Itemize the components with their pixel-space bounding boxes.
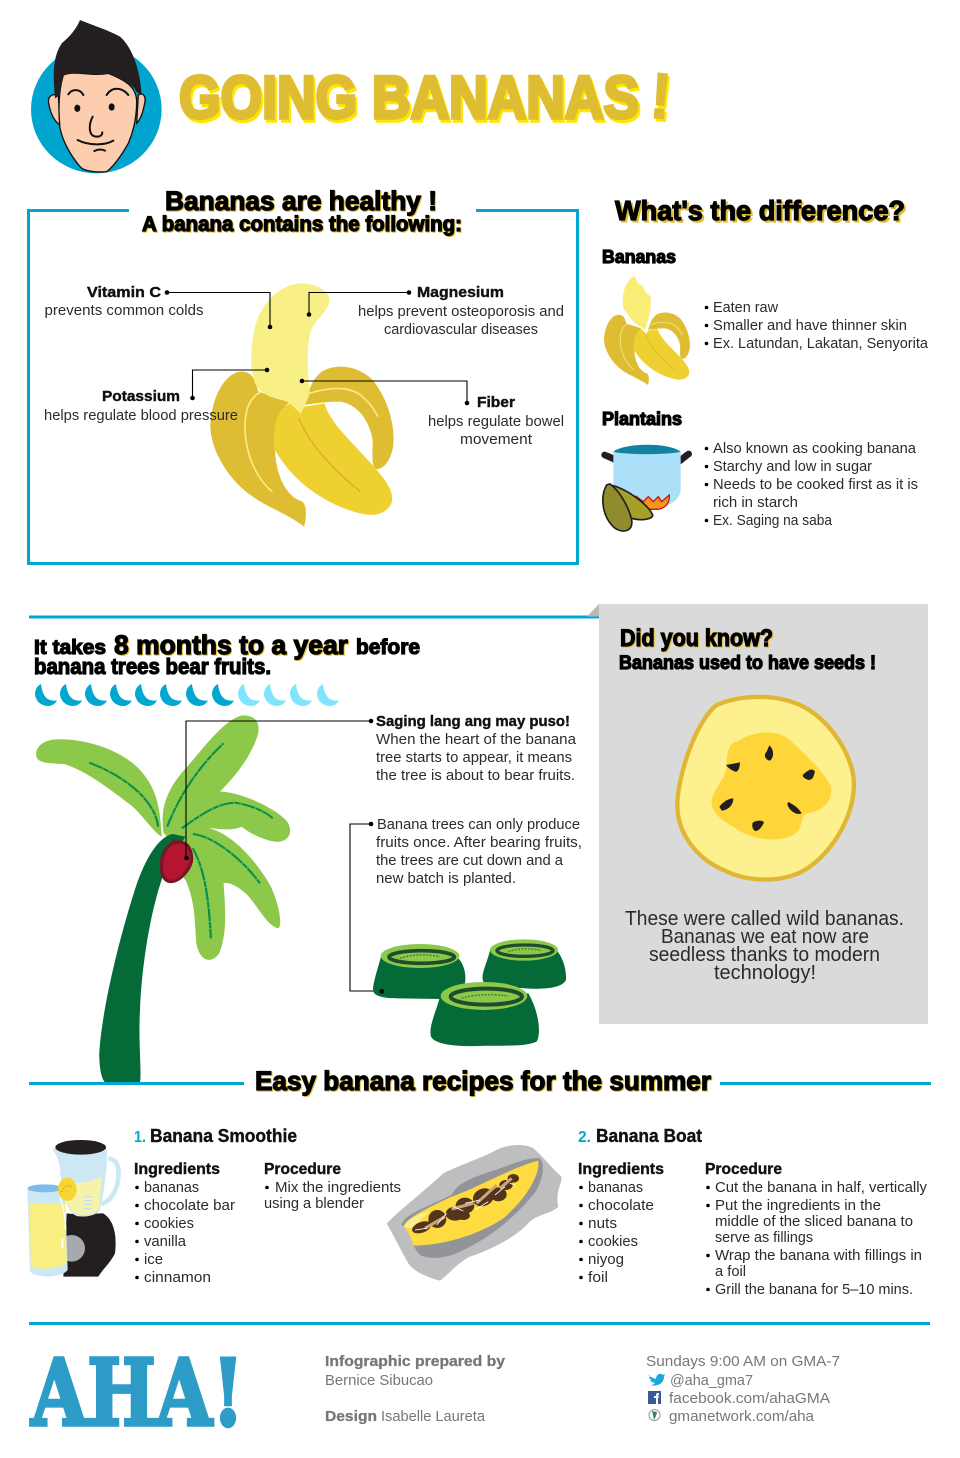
ingredients list 2: [578, 1161, 664, 1286]
callout: heart of the banana: tree starts to appear, it means: [376, 749, 572, 766]
illustration: banana cross-section: [677, 697, 854, 880]
heading: banana smoothie: 1.: [134, 1129, 146, 1146]
ingredients list 2: bananas: [588, 1179, 643, 1196]
title: GOING BANANAS: [179, 64, 639, 131]
credits: Bernice Sibucao: [325, 1372, 433, 1389]
ingredients list 1: chocolate bar: [144, 1197, 235, 1214]
callout: heart of the banana: Saging lang ang may puso!: [376, 713, 570, 730]
ingredients list 2: cookies: [588, 1233, 638, 1250]
list: banana traits: Eaten raw: [713, 299, 778, 316]
callout: potassium: [44, 368, 269, 424]
procedure 1: using a blender: [264, 1195, 364, 1212]
callout: trees produce fruit once: [350, 816, 582, 991]
ingredients list 1: cookies: [144, 1215, 194, 1232]
subheading: bananas: Bananas: [602, 247, 676, 267]
panel: what's the difference: [602, 195, 929, 531]
list: plantain traits: [705, 440, 918, 529]
contact details: @aha_gma7: [670, 1372, 753, 1389]
heading: 8 months to a year: 8 months to a year: [114, 630, 348, 660]
callout: fiber: movement: [460, 431, 533, 448]
title: !: [648, 59, 674, 133]
icon: facebook: [648, 1391, 661, 1404]
ingredients list 2: niyog: [588, 1251, 624, 1268]
callout: magnesium: cardiovascular diseases: [384, 321, 538, 338]
callout: magnesium: helps prevent osteoporosis and: [358, 303, 564, 320]
ingredients list 2: nuts: [588, 1215, 617, 1232]
text: wild bananas: These were called wild bananas.: [625, 908, 904, 930]
heading: 8 months to a year: It takes: [34, 637, 106, 659]
icon: globe: [649, 1410, 660, 1420]
callout: heart of the banana: the tree is about to bear fruits.: [376, 767, 575, 784]
callout: fiber: Fiber: [477, 394, 515, 411]
list: plantain traits: Also known as cooking banana: [713, 440, 917, 457]
ingredients list 1: vanilla: [144, 1233, 187, 1250]
ingredients list 2: Ingredients: [578, 1161, 664, 1178]
subheading: contains: A banana contains the following:: [142, 213, 462, 236]
heading: 8 months to a year: before: [356, 636, 420, 659]
text: wild bananas: technology!: [714, 962, 816, 984]
list: banana traits: Ex. Latundan, Lakatan, Senyorita: [713, 335, 929, 352]
list: banana traits: Smaller and have thinner skin: [713, 317, 907, 334]
procedure 1: [264, 1161, 401, 1212]
procedure 2: a foil: [715, 1263, 746, 1280]
ingredients list 2: foil: [588, 1269, 608, 1286]
illustration: banana boat in foil: [387, 1145, 562, 1281]
procedure 2: Procedure: [705, 1161, 782, 1178]
heading: 8 months to a year: [34, 630, 420, 679]
illustration: banana tree: [36, 715, 290, 1083]
credits: Isabelle Laureta: [381, 1408, 486, 1425]
list: plantain traits: rich in starch: [713, 494, 798, 511]
heading: 8 months to a year: banana trees bear fruits.: [34, 654, 271, 679]
list: banana traits: [705, 299, 929, 352]
callout: trees produce fruit once: new batch is planted.: [376, 870, 516, 887]
procedure 2: serve as fillings: [715, 1229, 813, 1246]
list: plantain traits: Needs to be cooked first as it is: [713, 476, 918, 493]
credits: [325, 1353, 506, 1425]
illustration: cut banana trunks: [373, 939, 566, 1046]
icon: blender and glass: [27, 1140, 119, 1277]
callout: trees produce fruit once: Banana trees can only produce: [377, 816, 580, 833]
subheading: seeds: Bananas used to have seeds !: [619, 653, 876, 674]
contact details: facebook.com/ahaGMA: [669, 1390, 830, 1407]
credits: Infographic prepared by: [325, 1353, 506, 1370]
ingredients list 2: chocolate: [588, 1197, 654, 1214]
procedure 2: Wrap the banana with fillings in: [715, 1247, 922, 1264]
ingredients list 1: cinnamon: [144, 1269, 211, 1286]
list: plantain traits: Ex. Saging na saba: [713, 512, 833, 529]
callout: fiber: [300, 379, 564, 448]
logo: AHA!: AHA!: [30, 1339, 244, 1447]
panel: recipe 1 banana smoothie: [27, 1126, 562, 1286]
callout: vitamin c: Vitamin C: [87, 284, 161, 301]
panel: recipe 2 banana boat: [578, 1126, 927, 1298]
ingredients list 1: ice: [144, 1251, 163, 1268]
procedure 2: Cut the banana in half, vertically: [715, 1179, 927, 1196]
panel: months to bear fruit: [29, 604, 599, 1083]
contact details: [646, 1353, 840, 1425]
procedure 2: Grill the banana for 5–10 mins.: [715, 1281, 913, 1298]
heading: banana boat: 2.: [578, 1129, 591, 1146]
callout: trees produce fruit once: fruits once. After bearing fruits,: [376, 834, 582, 851]
text: wild bananas: seedless thanks to modern: [649, 944, 880, 966]
icon: pot and plantains: [603, 445, 689, 531]
procedure 2: middle of the sliced banana to: [715, 1213, 913, 1230]
credits: Design: [325, 1408, 377, 1425]
contact details: gmanetwork.com/aha: [669, 1408, 815, 1425]
heading: banana boat: Banana Boat: [596, 1126, 702, 1146]
icon row: twelve moons: [35, 684, 339, 706]
callout: heart of the banana: [184, 713, 577, 860]
callout: heart of the banana: When the heart of the banana: [376, 731, 577, 748]
ingredients list 1: bananas: [144, 1179, 199, 1196]
procedure 1: Procedure: [264, 1161, 341, 1178]
text: wild bananas: Bananas we eat now are: [661, 926, 869, 948]
heading: did you know: Did you know?: [620, 625, 773, 652]
callout: fiber: helps regulate bowel: [428, 413, 564, 430]
heading: banana smoothie: Banana Smoothie: [150, 1126, 297, 1146]
callout: vitamin c: [44, 284, 272, 329]
panel: bananas are healthy: [28, 186, 578, 564]
ingredients list 1: [134, 1161, 235, 1286]
procedure 1: Mix the ingredients: [275, 1179, 401, 1196]
heading: easy banana recipes: [29, 1066, 931, 1096]
heading: difference: What's the difference?: [615, 195, 905, 226]
callout: vitamin c: prevents common colds: [44, 302, 204, 319]
list: plantain traits: Starchy and low in sugar: [713, 458, 872, 475]
callout: magnesium: Magnesium: [417, 284, 504, 301]
icon: cartoon face mascot: [31, 20, 162, 173]
text: wild bananas: [625, 908, 904, 984]
procedure 2: [705, 1161, 927, 1298]
panel: did you know: [599, 604, 928, 1024]
contact details: Sundays 9:00 AM on GMA-7: [646, 1353, 840, 1370]
heading: bananas are healthy: Bananas are healthy !: [165, 186, 437, 216]
subheading: plantains: Plantains: [602, 409, 682, 429]
heading: easy banana recipes: Easy banana recipes for the summer: [255, 1066, 711, 1096]
callout: potassium: helps regulate blood pressure: [44, 407, 238, 424]
procedure 2: Put the ingredients in the: [715, 1197, 881, 1214]
callout: magnesium: [307, 284, 564, 338]
callout: potassium: Potassium: [102, 388, 180, 405]
icon: twitter: [648, 1374, 665, 1386]
ingredients list 1: Ingredients: [134, 1161, 220, 1178]
icon: bitten banana: [604, 276, 690, 385]
footer: [29, 1322, 930, 1447]
callout: trees produce fruit once: the trees are cut down and a: [376, 852, 564, 869]
illustration: peeled banana: [210, 283, 394, 527]
